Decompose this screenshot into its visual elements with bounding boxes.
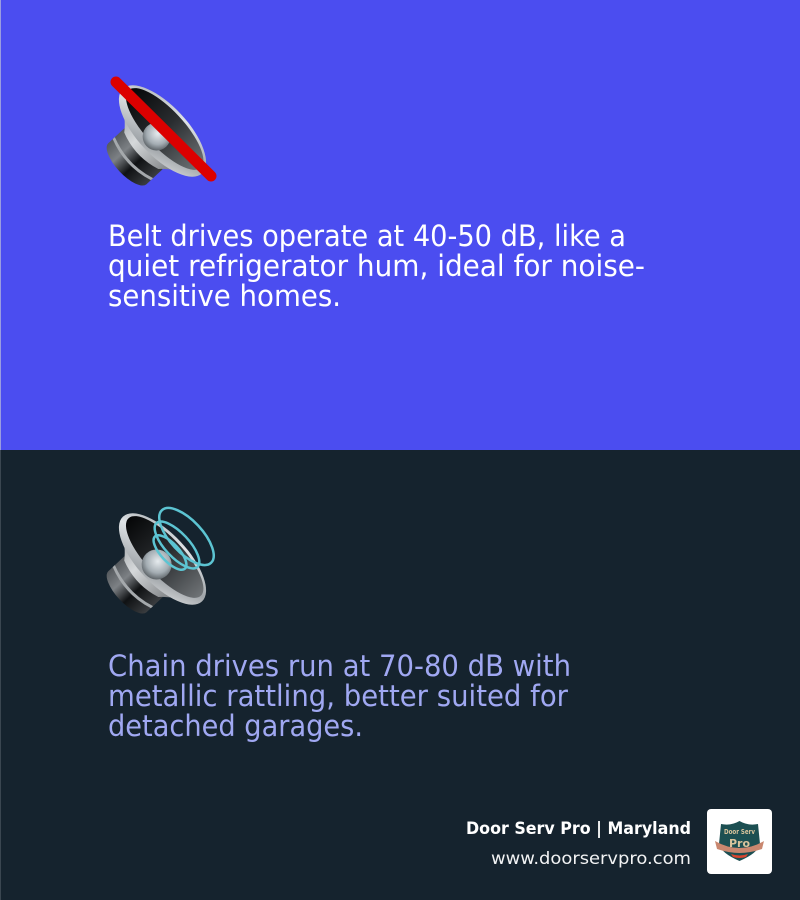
text: belt drive description: Belt drives operate at 40-50 dB, like a [108,219,626,253]
icon: sound rings [148,499,223,575]
panel: belt drive (blue) [0,0,800,450]
logo: Door Serv Pro badge [707,809,772,874]
text: belt drive description [108,219,645,313]
logo: Door Serv Pro badge: Door Serv [724,828,755,836]
icon: muted speaker [80,72,220,214]
icon: loud speaker [80,499,223,642]
footer: brand name: Door Serv Pro | Maryland [466,819,691,839]
icon: red slash [116,82,211,176]
text: chain drive description: detached garages. [108,709,363,743]
text: chain drive description: Chain drives run at 70-80 dB with [108,649,571,683]
text: chain drive description [108,649,571,743]
text: belt drive description: quiet refrigerator hum, ideal for noise- [108,249,645,283]
text: belt drive description: sensitive homes. [108,279,341,313]
panel: chain drive (dark) [0,450,800,900]
logo: Door Serv Pro badge: Pro [729,837,750,850]
text: chain drive description: metallic rattling, better suited for [108,679,568,713]
footer: website: www.doorservpro.com [491,849,691,869]
